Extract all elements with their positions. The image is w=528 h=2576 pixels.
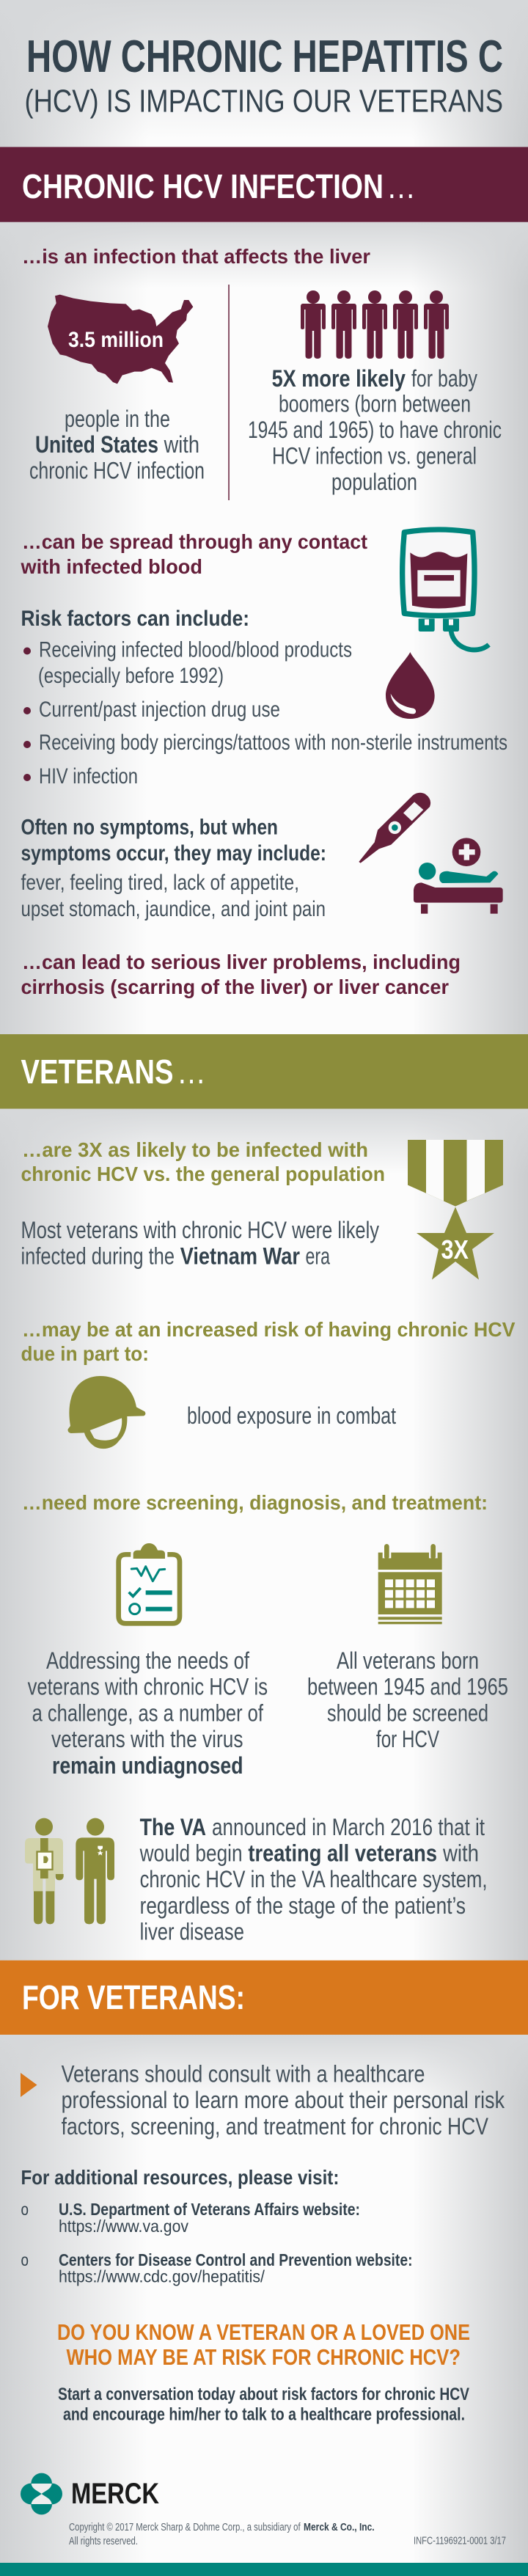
- text: people in the United States: [29, 406, 205, 484]
- text: consult a healthcare professional: Veterans should consult with a healthcare: [62, 2061, 425, 2087]
- text: copyright: Merck & Co., Inc.: [304, 2522, 375, 2533]
- text: symptoms: upset stomach, jaundice, and joint pain: [21, 897, 326, 921]
- text: Vietnam War era: era: [305, 1243, 330, 1270]
- list: resources: o: [21, 2200, 29, 2219]
- list: risk factors: Current/past injection drug use: [39, 698, 280, 722]
- heading: increased risk: due in part to:: [21, 1342, 149, 1365]
- text: consult a healthcare professional: [62, 2061, 505, 2140]
- icon: calendar: [378, 1544, 442, 1624]
- icon: helmet: [67, 1376, 145, 1449]
- text: Vietnam War era: Most veterans with chronic HCV were likely: [21, 1217, 379, 1243]
- text: all veterans should be screened: should be screened: [327, 1699, 488, 1726]
- heading: increased risk: [21, 1318, 516, 1365]
- text: all veterans should be screened: for HCV: [376, 1726, 439, 1752]
- text: 5X more likely: for baby: [411, 365, 477, 392]
- text: addressing the needs: a challenge, as a number of: [32, 1699, 263, 1726]
- text: Vietnam War era: infected during the: [21, 1243, 175, 1270]
- banner: chronic HCV infection: CHRONIC HCV INFECTION: [22, 167, 384, 205]
- icon: blood bag: [403, 530, 489, 650]
- icon: thermometer: [359, 793, 430, 863]
- logo: Merck: [21, 2473, 159, 2514]
- text: VA announcement: liver disease: [140, 1919, 244, 1945]
- text: people in the United States: United States: [35, 431, 158, 458]
- text: VA announcement: treating all veterans: [248, 1840, 437, 1866]
- text: people in the United States: chronic HCV infection: [29, 458, 205, 484]
- icon: medal 3X: 3X: [441, 1234, 469, 1265]
- text: start a conversation: [58, 2385, 469, 2425]
- text: VA announcement: regardless of the stage of the patient’s: [140, 1892, 466, 1919]
- text: 5X more likely: population: [331, 469, 417, 495]
- heading: increased risk: …may be at an increased risk of having chronic HCV: [22, 1318, 516, 1341]
- text: symptoms: [21, 816, 326, 921]
- text: all veterans should be screened: All veterans born: [337, 1647, 479, 1674]
- footer bar: [0, 2563, 528, 2576]
- heading: serious liver problems: cirrhosis (scarring of the liver) or liver cancer: [21, 976, 449, 998]
- text: Vietnam War era: Vietnam War: [180, 1243, 300, 1270]
- heading: affects the liver: …is an infection that affects the liver: [22, 245, 370, 268]
- text: addressing the needs: [28, 1647, 268, 1779]
- text: symptoms: symptoms occur, they may include:: [21, 841, 326, 866]
- list: resources: https://www.va.gov: [59, 2217, 188, 2236]
- banner: chronic HCV infection: [0, 147, 528, 222]
- icon: map of the United States with 3.5 million: 3.5 million: [68, 328, 164, 352]
- text: copyright: Copyright © 2017 Merck Sharp & Dohme Corp., a subsidiary of: [69, 2522, 301, 2533]
- text: people in the United States: with: [164, 431, 199, 458]
- heading: spread through blood: …can be spread through any contact: [22, 530, 367, 553]
- list: risk factors: Receiving infected blood/blood products: [39, 638, 352, 662]
- icon: doctor and veteran: [25, 1818, 114, 1924]
- list: risk factors: [23, 638, 507, 788]
- heading: spread through blood: with infected blood: [21, 555, 202, 578]
- text: blood exposure: blood exposure in combat: [187, 1402, 396, 1429]
- text: VA announcement: The VA: [140, 1814, 206, 1840]
- logo: Merck: MERCK: [71, 2478, 159, 2510]
- text: copyright: [69, 2522, 375, 2547]
- icon: map of the United States with 3.5 million: [48, 295, 193, 384]
- list: resources: [21, 2200, 412, 2286]
- text: 5X more likely: [248, 365, 502, 495]
- icon: doctor: [25, 1818, 64, 1924]
- banner: veterans: VETERANS: [21, 1053, 173, 1091]
- panel: chronic HCV infection: [0, 147, 528, 998]
- icon: five people: [301, 290, 449, 359]
- text: Vietnam War era: [21, 1217, 379, 1270]
- heading: serious liver problems: …can lead to serious liver problems, including: [22, 951, 461, 973]
- text: people in the United States: people in the: [65, 406, 170, 432]
- text: 5X more likely: boomers (born between: [279, 391, 471, 417]
- banner: veterans: [0, 1034, 528, 1109]
- icon: medal 3X: [408, 1140, 503, 1280]
- list: resources: https://www.cdc.gov/hepatitis/: [59, 2266, 265, 2286]
- heading: serious liver problems: [21, 951, 461, 998]
- icon: blood drop: [386, 652, 435, 719]
- text: addressing the needs: Addressing the needs of: [46, 1647, 249, 1674]
- heading: 3X as likely: …are 3X as likely to be infected with: [22, 1138, 368, 1161]
- list: risk factors: (especially before 1992): [38, 664, 224, 688]
- title: [25, 32, 503, 120]
- heading: additional resources: For additional resources, please visit:: [21, 2166, 339, 2189]
- text: symptoms: fever, feeling tired, lack of appetite,: [21, 871, 299, 895]
- panel: veterans: [0, 1034, 528, 1945]
- text: addressing the needs: veterans with chronic HCV is: [28, 1674, 268, 1700]
- text: all veterans should be screened: [307, 1647, 508, 1752]
- callout: do you know a veteran: [57, 2319, 470, 2370]
- banner: chronic HCV infection: …: [386, 167, 416, 205]
- banner: for veterans: FOR VETERANS:: [22, 1978, 245, 2016]
- text: symptoms: Often no symptoms, but when: [21, 816, 278, 839]
- heading: need more screening: …need more screening, diagnosis, and treatment:: [22, 1491, 488, 1514]
- panel: for veterans: [0, 1961, 528, 2576]
- heading: 3X as likely: chronic HCV vs. the general population: [21, 1163, 385, 1185]
- icon: veteran: [76, 1818, 114, 1924]
- text: VA announcement: with: [442, 1840, 479, 1866]
- text: VA announcement: would begin: [139, 1840, 243, 1866]
- subheading: risk factors: Risk factors can include:: [21, 607, 249, 631]
- text: 5X more likely: 5X more likely: [272, 365, 406, 392]
- text: addressing the needs: remain undiagnosed: [52, 1752, 243, 1779]
- list: resources: Centers for Disease Control and Prevention website:: [59, 2250, 412, 2269]
- banner: for veterans: [0, 1961, 528, 2035]
- heading: 3X as likely: [21, 1138, 385, 1185]
- banner: veterans: …: [177, 1053, 206, 1091]
- text: addressing the needs: veterans with the virus: [51, 1726, 243, 1752]
- list: resources: U.S. Department of Veterans Affairs website:: [59, 2200, 360, 2219]
- text: copyright: All rights reserved.: [69, 2536, 138, 2547]
- list: resources: o: [21, 2250, 29, 2269]
- icon: patient in bed: [414, 838, 503, 914]
- heading: spread through blood: [21, 530, 367, 578]
- text: VA announcement: [139, 1814, 487, 1945]
- icon: orange arrow: [21, 2073, 37, 2097]
- icon: clipboard: [119, 1543, 180, 1623]
- list: risk factors: HIV infection: [39, 764, 138, 788]
